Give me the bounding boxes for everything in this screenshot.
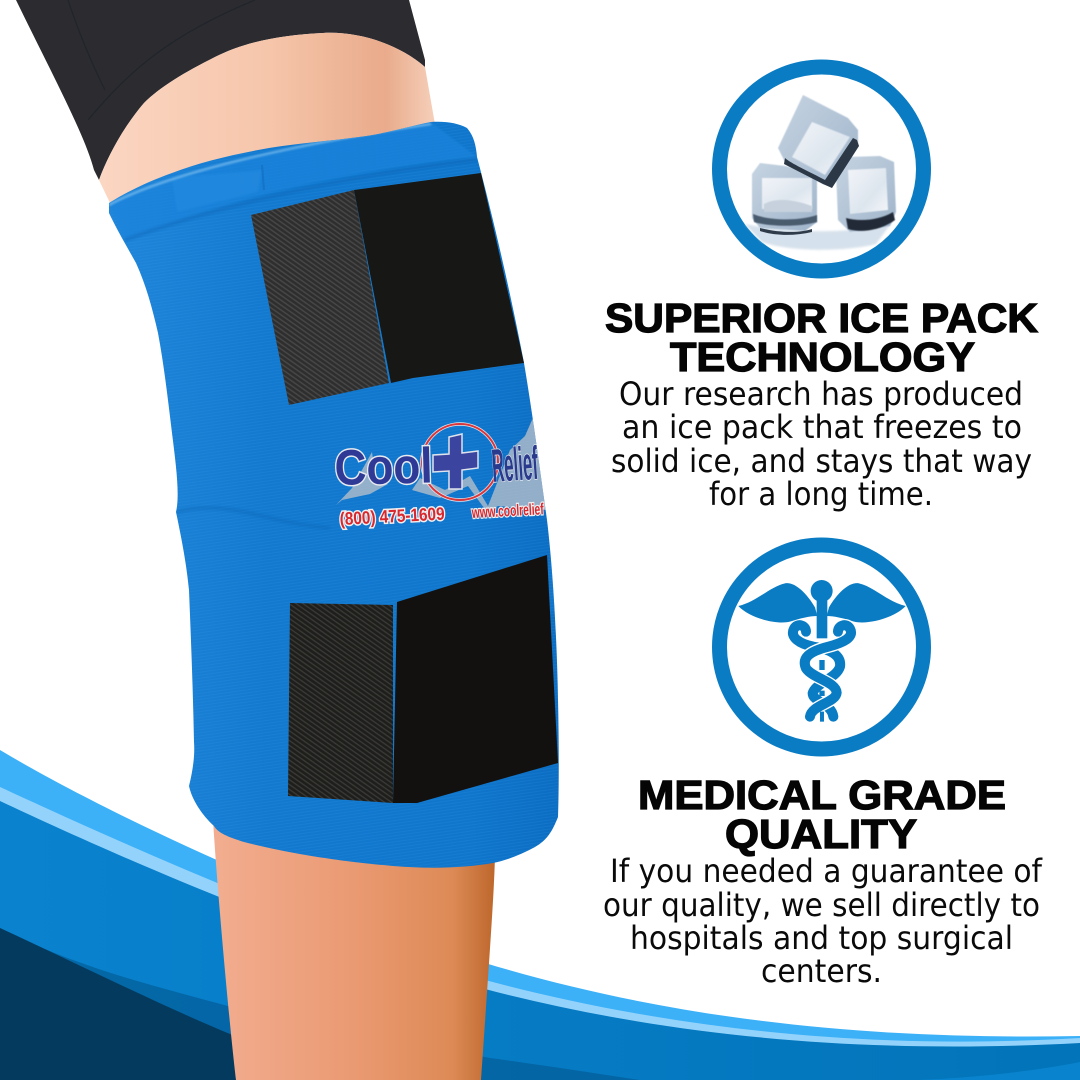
cool relief logo bbox=[334, 412, 546, 529]
icon: ice cubes in circle bbox=[720, 67, 924, 271]
heading: superior ice pack technology: SUPERIOR ICE PACK bbox=[605, 295, 1038, 341]
text: quality description: If you needed a guarantee of bbox=[610, 852, 1043, 890]
icon: caduceus in circle bbox=[720, 545, 924, 749]
heading: superior ice pack technology: TECHNOLOGY bbox=[670, 334, 975, 380]
background waves bbox=[0, 750, 1080, 1080]
puddle under cubes bbox=[745, 222, 892, 250]
lower leg skin bbox=[213, 820, 495, 1080]
heading: medical grade quality: QUALITY bbox=[725, 811, 917, 857]
top velcro strap bbox=[251, 173, 524, 405]
text: ice pack description: for a long time. bbox=[709, 475, 933, 513]
text: quality description bbox=[603, 852, 1043, 990]
text: ice pack description: Our research has produced bbox=[619, 375, 1023, 413]
shorts bbox=[16, 0, 425, 180]
text: ice pack description bbox=[611, 375, 1032, 513]
knee ice pack wrap bbox=[109, 122, 559, 868]
heading: superior ice pack technology bbox=[605, 295, 1038, 380]
upper leg skin bbox=[99, 33, 436, 205]
text: quality description: hospitals and top surgical bbox=[630, 919, 1013, 957]
right ice cube bbox=[836, 156, 896, 232]
cool relief logo: www.coolrelief bbox=[471, 501, 545, 522]
text: ice pack description: solid ice, and stays that way bbox=[611, 442, 1032, 480]
bottom velcro strap bbox=[288, 555, 558, 803]
text: quality description: our quality, we sell directly to bbox=[603, 886, 1040, 924]
text: ice pack description: an ice pack that freezes to bbox=[622, 408, 1022, 446]
cool relief logo: Cool bbox=[334, 437, 433, 496]
cool relief logo: (800) 475-1609 bbox=[339, 504, 445, 529]
left ice cube bbox=[752, 163, 817, 235]
knee ice pack wrap: Relief bbox=[490, 436, 540, 492]
top ice cube bbox=[778, 95, 859, 188]
text: quality description: centers. bbox=[761, 952, 882, 990]
heading: medical grade quality: MEDICAL GRADE bbox=[638, 772, 1006, 818]
heading: medical grade quality bbox=[638, 772, 1006, 857]
